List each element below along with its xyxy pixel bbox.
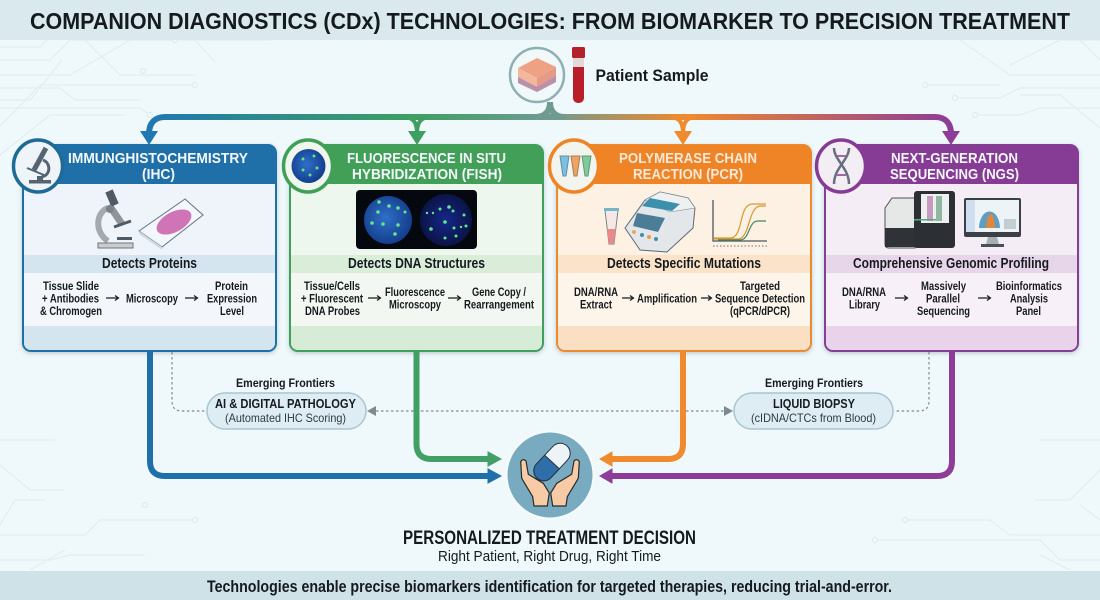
panel: FISH (284, 140, 543, 351)
patient sample (510, 47, 708, 103)
panel: PCR (550, 140, 811, 351)
subheading: Detects Proteins (102, 256, 197, 272)
dotted connectors: emerging frontiers (172, 352, 929, 416)
panel: IHC (14, 140, 276, 351)
process flow (842, 281, 1062, 318)
callout: liquid biopsy: (cIDNA/CTCs from Blood) (751, 411, 876, 425)
process flow: Amplification (637, 294, 697, 306)
process flow: Library (849, 300, 880, 312)
process flow: Microscopy (389, 300, 441, 312)
heading: (IHC) (142, 166, 175, 183)
heading: FLUORESCENCE IN SITU (347, 150, 506, 167)
heading: NEXT-GENERATION (891, 150, 1018, 167)
footer banner (0, 571, 1100, 600)
process flow: Microscopy (126, 294, 178, 306)
callout: AI and digital pathology: AI & DIGITAL PATHOLOGY (215, 396, 356, 411)
heading (890, 150, 1019, 183)
illustration: fluorescence image (356, 190, 477, 249)
icon: tissue block (510, 48, 564, 102)
process flow (40, 281, 257, 318)
arrow: sample to four technologies (140, 102, 960, 145)
heading: REACTION (PCR) (633, 166, 743, 183)
process flow: DNA/RNA (842, 287, 886, 299)
treatment decision text: Right Patient, Right Drug, Right Time (438, 549, 661, 565)
subheading: Detects Specific Mutations (607, 256, 761, 272)
process flow: Level (220, 306, 244, 318)
process flow: Analysis (1010, 294, 1048, 306)
process flow: DNA Probes (305, 306, 360, 318)
process flow: Gene Copy / (472, 287, 527, 299)
title banner (0, 0, 1100, 40)
label: patient sample: Patient Sample (596, 66, 708, 85)
process flow: Massively (921, 281, 966, 293)
process flow (574, 281, 805, 318)
process flow: Sequencing (917, 306, 970, 318)
process flow: (qPCR/dPCR) (730, 306, 790, 318)
heading: POLYMERASE CHAIN (619, 150, 757, 167)
process flow: Tissue/Cells (304, 281, 360, 293)
process flow: Rearrangement (464, 300, 534, 312)
callout: AI and digital pathology (207, 376, 366, 429)
icon: hands holding capsule (505, 430, 595, 520)
heading (347, 150, 506, 183)
process flow: & Chromogen (40, 306, 102, 318)
callout: AI and digital pathology: Emerging Frontiers (236, 376, 335, 390)
callout: liquid biopsy (734, 376, 893, 429)
subheading: Detects DNA Structures (348, 256, 485, 272)
process flow: + Fluorescent (301, 294, 363, 306)
process flow: DNA/RNA (574, 287, 618, 299)
process flow: Bioinformatics (996, 281, 1062, 293)
process flow: Fluorescence (385, 287, 445, 299)
process flow: Expression (207, 294, 257, 306)
process flow: Panel (1016, 306, 1041, 318)
process flow: + Antibodies (42, 294, 99, 306)
icon: microscope badge (14, 140, 62, 192)
icon: DNA helix badge (816, 140, 866, 192)
callout: liquid biopsy: LIQUID BIOPSY (773, 396, 855, 411)
illustration: thermocycler and curves (604, 192, 767, 252)
icon: blood tube (572, 47, 585, 103)
arrows: technologies to treatment decision (150, 351, 952, 483)
heading (619, 150, 757, 183)
heading: HYBRIDIZATION (FISH) (352, 166, 502, 183)
process flow: Extract (580, 300, 612, 312)
process flow (301, 281, 534, 318)
illustration: microscope and slide (98, 191, 203, 250)
process flow: Tissue Slide (43, 281, 99, 293)
callout: liquid biopsy: Emerging Frontiers (765, 376, 863, 390)
process flow: Sequence Detection (715, 294, 805, 306)
heading: IMMUNGHISTOCHEMISTRY (68, 150, 248, 167)
subheading: Comprehensive Genomic Profiling (853, 256, 1049, 272)
panel: NGS (816, 140, 1078, 351)
treatment decision text (403, 528, 696, 565)
footer banner: Technologies enable precise biomarkers identification for targeted therapies, reducing trial-and-error. (207, 577, 892, 596)
callout: AI and digital pathology: (Automated IHC Scoring) (225, 411, 346, 425)
icon: PCR tubes badge (550, 140, 598, 192)
process flow: Targeted (740, 281, 780, 293)
heading: SEQUENCING (NGS) (890, 166, 1019, 183)
process flow: Protein (215, 281, 248, 293)
heading (68, 150, 248, 183)
process flow: Parallel (926, 294, 960, 306)
treatment decision text: PERSONALIZED TREATMENT DECISION (403, 528, 696, 549)
icon: nucleus badge (284, 140, 332, 192)
illustration: sequencer and monitor (885, 191, 1021, 248)
